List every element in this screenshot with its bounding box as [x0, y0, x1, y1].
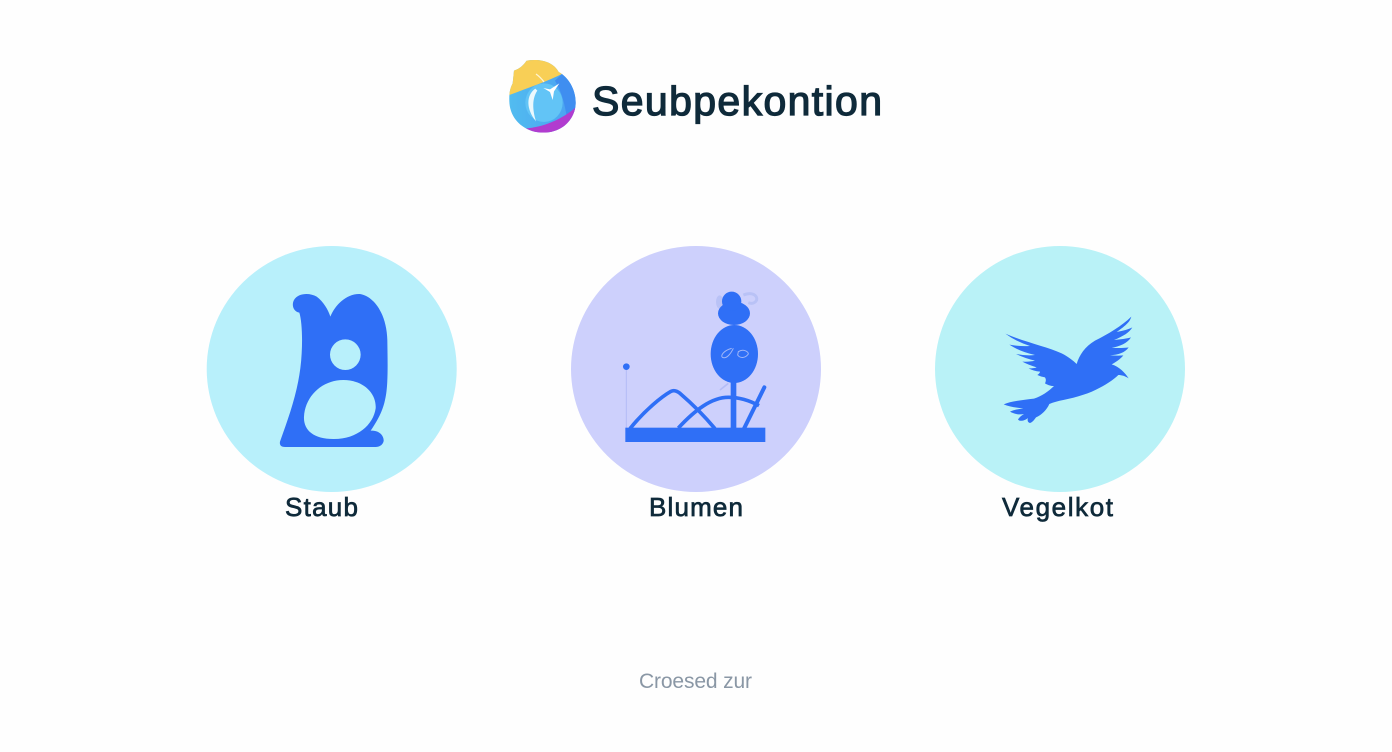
circle: Staub background: [207, 246, 457, 492]
footer text: Croesed zur: [639, 670, 752, 693]
circle: Blumen background: [571, 246, 821, 492]
logo: [509, 60, 576, 133]
title: Seubpekontion: [592, 78, 882, 124]
icon: Blumen plant and hills: [623, 292, 765, 442]
label: Blumen: Blumen: [649, 492, 743, 522]
panel: Staub: [207, 246, 457, 522]
icon: Staub figure: [280, 294, 388, 447]
panel: Blumen: [571, 246, 821, 522]
circle: Vegelkot background: [935, 246, 1185, 492]
label: Vegelkot: Vegelkot: [1002, 492, 1114, 522]
label: Staub: Staub: [285, 492, 358, 522]
icon: bird: [1004, 317, 1132, 423]
panel: Vegelkot: [935, 246, 1185, 522]
